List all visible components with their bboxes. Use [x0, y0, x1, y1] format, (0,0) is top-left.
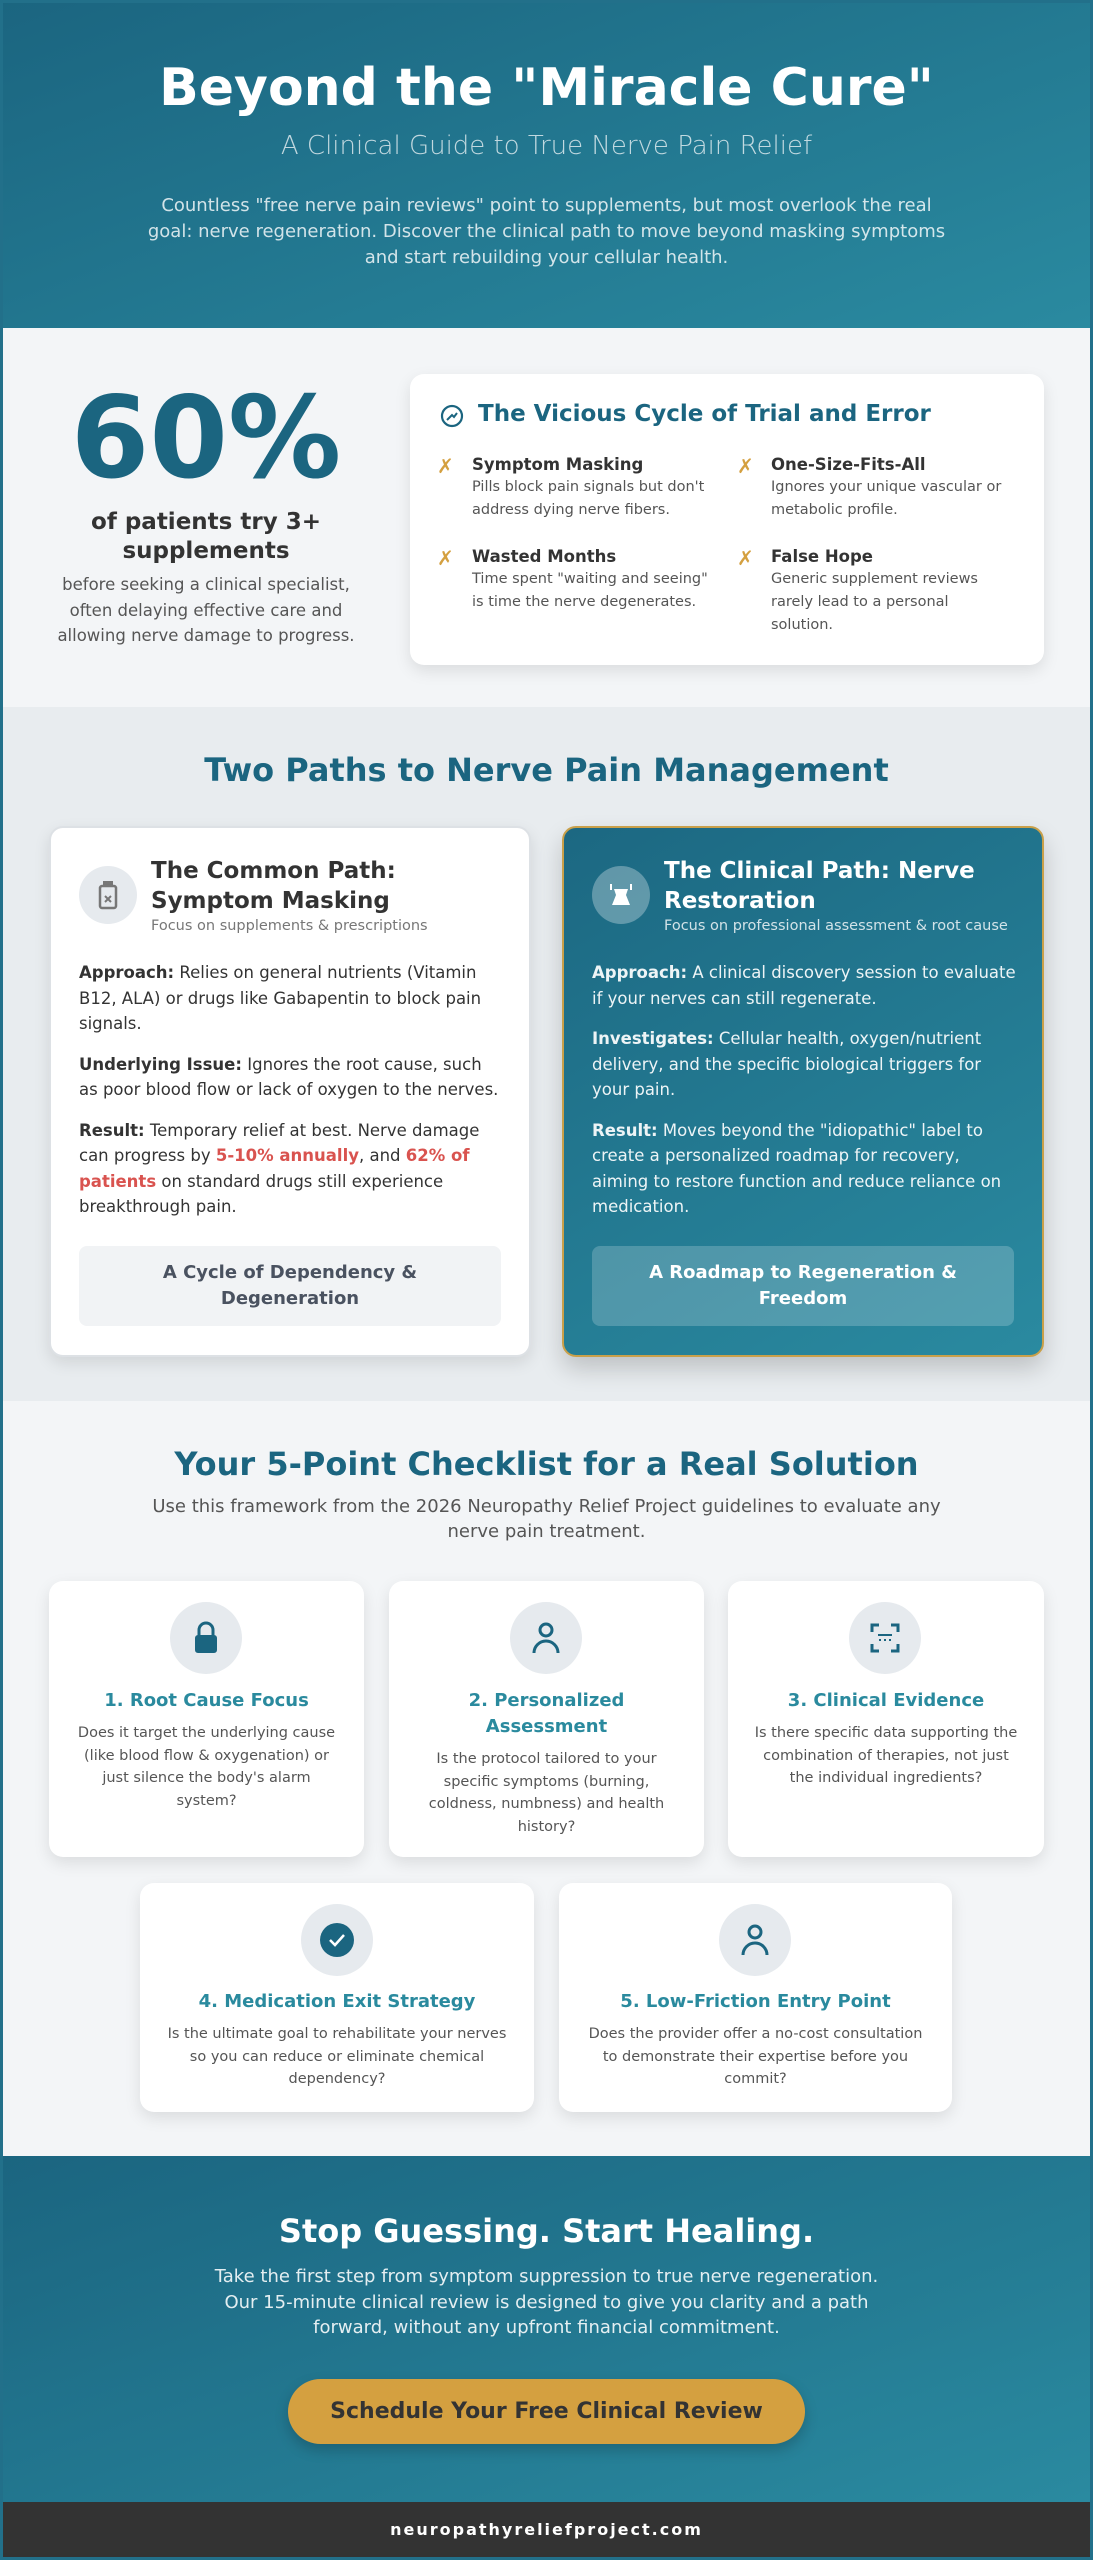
- card title: Focus on professional assessment & root cause: [664, 918, 1008, 934]
- card 4: [140, 1883, 534, 2112]
- card 5: [559, 1883, 952, 2112]
- heading: The Vicious Cycle of Trial and Error: [478, 401, 931, 427]
- body text: Approach: Relies on general nutrients (Vitamin B12, ALA) or drugs like Gabapentin to block pain signals.: [79, 963, 481, 1033]
- body text: [79, 963, 498, 1216]
- body text: Investigates: Cellular health, oxygen/nutrient delivery, and the specific biological triggers for your pain.: [592, 1029, 981, 1099]
- card 2: 2. Personalized: [469, 1690, 624, 1711]
- stat: 60%: supplements: [122, 538, 290, 564]
- outcome box: Freedom: [759, 1288, 847, 1309]
- stat: 60%: 60%: [71, 372, 341, 504]
- item list: Pills block pain signals but don't address dying nerve fibers.: [472, 479, 704, 518]
- item list: Generic supplement reviews rarely lead to a personal solution.: [771, 571, 978, 633]
- card 5: to demonstrate their expertise before you: [603, 2048, 908, 2064]
- icon: lock: [170, 1602, 242, 1674]
- section: checklist: [0, 1401, 1093, 2156]
- card title: [664, 858, 1008, 934]
- stat: 60%: [57, 372, 355, 645]
- item list: ✗: [737, 546, 754, 570]
- body text: if your nerves can still regenerate.: [592, 988, 877, 1008]
- item list: ✗: [437, 546, 454, 570]
- card 3: [728, 1581, 1044, 1857]
- body text: Underlying Issue: Ignores the root cause, such as poor blood flow or lack of oxygen to the nerves.: [79, 1054, 498, 1099]
- body text: Result: Moves beyond the "idiopathic" label to create a personalized roadmap for recovery,: [592, 1120, 983, 1165]
- subtitle: A Clinical Guide to True Nerve Pain Relief: [281, 131, 812, 161]
- card 5: commit?: [724, 2071, 787, 2087]
- icon: cycle: [440, 404, 464, 428]
- item list: ✗: [437, 454, 454, 478]
- outcome box: Degeneration: [221, 1288, 359, 1309]
- icon: restoration: [592, 866, 650, 924]
- intro text: Countless "free nerve pain reviews" point to supplements, but most overlook the real goal: nerve regeneration. Discover the clinical path to move beyond masking symptoms and start rebuilding your cellular health.: [148, 195, 945, 268]
- card 5: Does the provider offer a no-cost consultation: [589, 2026, 922, 2042]
- item list: Ignores your unique vascular or metabolic profile.: [771, 479, 1001, 518]
- icon: person: [510, 1602, 582, 1674]
- heading: Your 5-Point Checklist for a Real Solution: [174, 1445, 919, 1483]
- card 5: 5. Low-Friction Entry Point: [620, 1991, 891, 2012]
- card 1: Does it target the underlying cause (like blood flow & oxygenation) or just silence the body's alarm system?: [78, 1725, 335, 1808]
- stat: 60%: before seeking a clinical specialist, often delaying effective care and allowing nerve damage to progress.: [57, 575, 355, 645]
- icon: pill bottle: [79, 866, 137, 924]
- icon: check: [301, 1904, 373, 1976]
- card title: [151, 858, 428, 934]
- stat: 60%: of patients try 3+: [91, 509, 321, 535]
- outcome box: A Cycle of Dependency &: [163, 1262, 417, 1283]
- item list: False Hope: [771, 547, 873, 566]
- card 2: [389, 1581, 704, 1857]
- card 2: Assessment: [486, 1716, 607, 1737]
- footer: neuropathyreliefproject.com: [390, 2520, 703, 2539]
- outcome box: [79, 1246, 501, 1326]
- card 1: [49, 1581, 364, 1857]
- item list: ✗: [737, 454, 754, 478]
- card 1: 1. Root Cause Focus: [104, 1690, 309, 1711]
- CTA button: [288, 2379, 805, 2444]
- item list: [437, 454, 1002, 633]
- header: [0, 0, 1093, 328]
- subheading: Use this framework from the 2026 Neuropathy Relief Project guidelines to evaluate any nerve pain treatment.: [152, 1496, 941, 1542]
- card 3: Is there specific data supporting the combination of therapies, not just the individual ingredients?: [755, 1725, 1017, 1786]
- card title: Focus on supplements & prescriptions: [151, 918, 428, 934]
- outcome box: A Roadmap to Regeneration &: [649, 1262, 957, 1283]
- panel: clinical path: [562, 826, 1044, 1357]
- CTA heading: Stop Guessing. Start Healing.: [279, 2212, 814, 2250]
- CTA section: [0, 2156, 1093, 2502]
- item list: Wasted Months: [472, 547, 616, 566]
- card title: The Common Path:: [151, 858, 396, 884]
- item list: Time spent "waiting and seeing" is time the nerve degenerates.: [472, 571, 708, 610]
- card 2: Is the protocol tailored to your specific symptoms (burning, coldness, numbness) and health history?: [429, 1751, 664, 1834]
- footer: [0, 2502, 1093, 2560]
- section: two paths: [0, 707, 1093, 1401]
- panel: vicious cycle: [410, 374, 1044, 665]
- item list: One-Size-Fits-All: [771, 455, 926, 474]
- stat section: [0, 328, 1093, 707]
- item list: Symptom Masking: [472, 455, 643, 474]
- body text: aiming to restore function and reduce reliance on medication.: [592, 1172, 1001, 1216]
- outcome box: [592, 1246, 1014, 1326]
- body text: Approach: A clinical discovery session to evaluate: [592, 963, 1016, 982]
- heading: Two Paths to Nerve Pain Management: [204, 751, 889, 789]
- icon: scan: [849, 1602, 921, 1674]
- card title: Symptom Masking: [151, 888, 390, 914]
- card title: The Clinical Path: Nerve: [664, 858, 975, 884]
- title: Beyond the "Miracle Cure": [159, 58, 934, 118]
- icon: person: [719, 1904, 791, 1976]
- body text: [592, 963, 1016, 1216]
- card 4: 4. Medication Exit Strategy: [199, 1991, 475, 2012]
- CTA button: Schedule Your Free Clinical Review: [330, 2399, 763, 2424]
- card 4: Is the ultimate goal to rehabilitate your nerves so you can reduce or eliminate chemical dependency?: [168, 2026, 506, 2087]
- panel: common path: [49, 826, 531, 1357]
- CTA text: Take the first step from symptom suppression to true nerve regeneration. Our 15-minute clinical review is designed to give you clarity and a path forward, without any upfront financial commitment.: [215, 2266, 878, 2338]
- body text: Result: Temporary relief at best. Nerve damage can progress by 5-10% annually, and 62% of patients on standard drugs still experience breakthrough pain.: [79, 1120, 479, 1216]
- card 3: 3. Clinical Evidence: [788, 1690, 984, 1711]
- card title: Restoration: [664, 888, 816, 914]
